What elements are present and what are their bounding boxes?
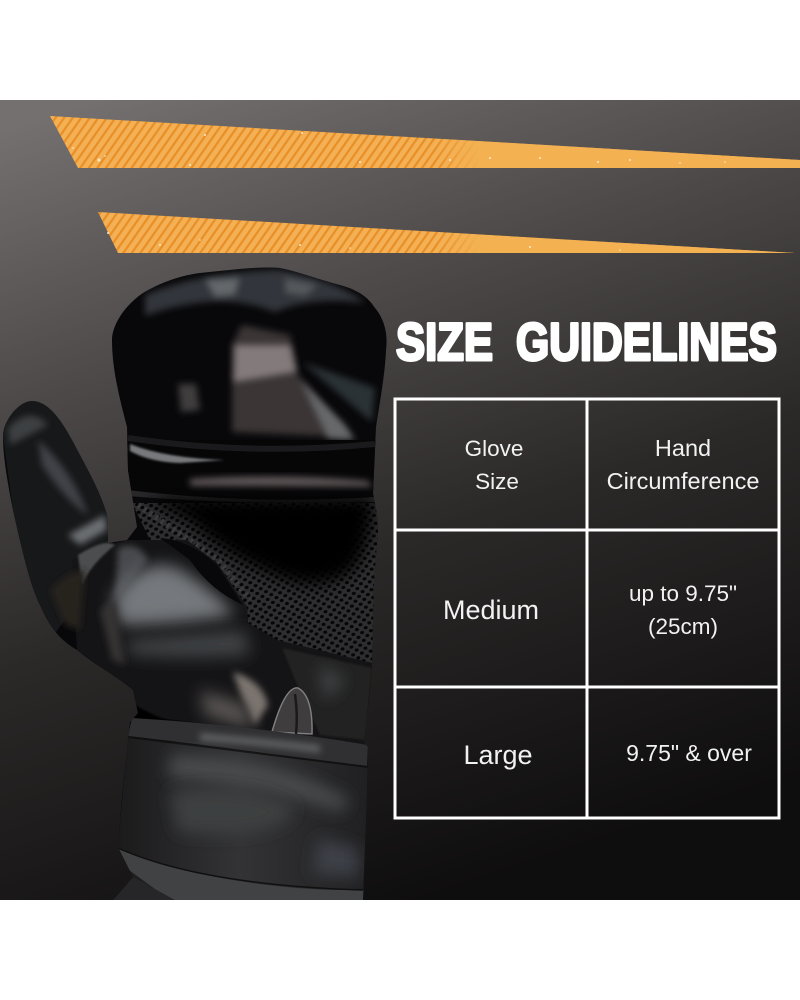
- header: hand circumference: Circumference: [607, 468, 759, 494]
- header: hand circumference: Hand: [655, 435, 711, 461]
- glove face reflection: [232, 325, 350, 437]
- cuff band: [127, 440, 377, 492]
- top orange stripe: [50, 116, 800, 168]
- palm leather: [72, 540, 372, 745]
- size table: [395, 399, 779, 818]
- strap loop: [272, 688, 312, 734]
- row: medium label: Medium: [443, 595, 539, 625]
- header: glove size: Glove: [465, 436, 523, 461]
- mesh panel: [132, 503, 378, 663]
- lower orange stripe: [98, 212, 795, 253]
- wrist strap: [128, 718, 368, 768]
- title word: size: SIZE: [396, 313, 493, 372]
- row: large label: Large: [463, 740, 533, 770]
- title: [396, 313, 777, 372]
- thumb: [3, 401, 110, 640]
- row: medium value: (25cm): [648, 614, 718, 639]
- glove top sheen: [145, 270, 365, 316]
- header: glove size: Size: [475, 469, 519, 494]
- row: large value: 9.75" & over: [626, 740, 752, 766]
- boxing bag glove photo: [0, 260, 400, 900]
- row: medium value: up to 9.75": [629, 581, 737, 606]
- page background panel: [0, 100, 800, 900]
